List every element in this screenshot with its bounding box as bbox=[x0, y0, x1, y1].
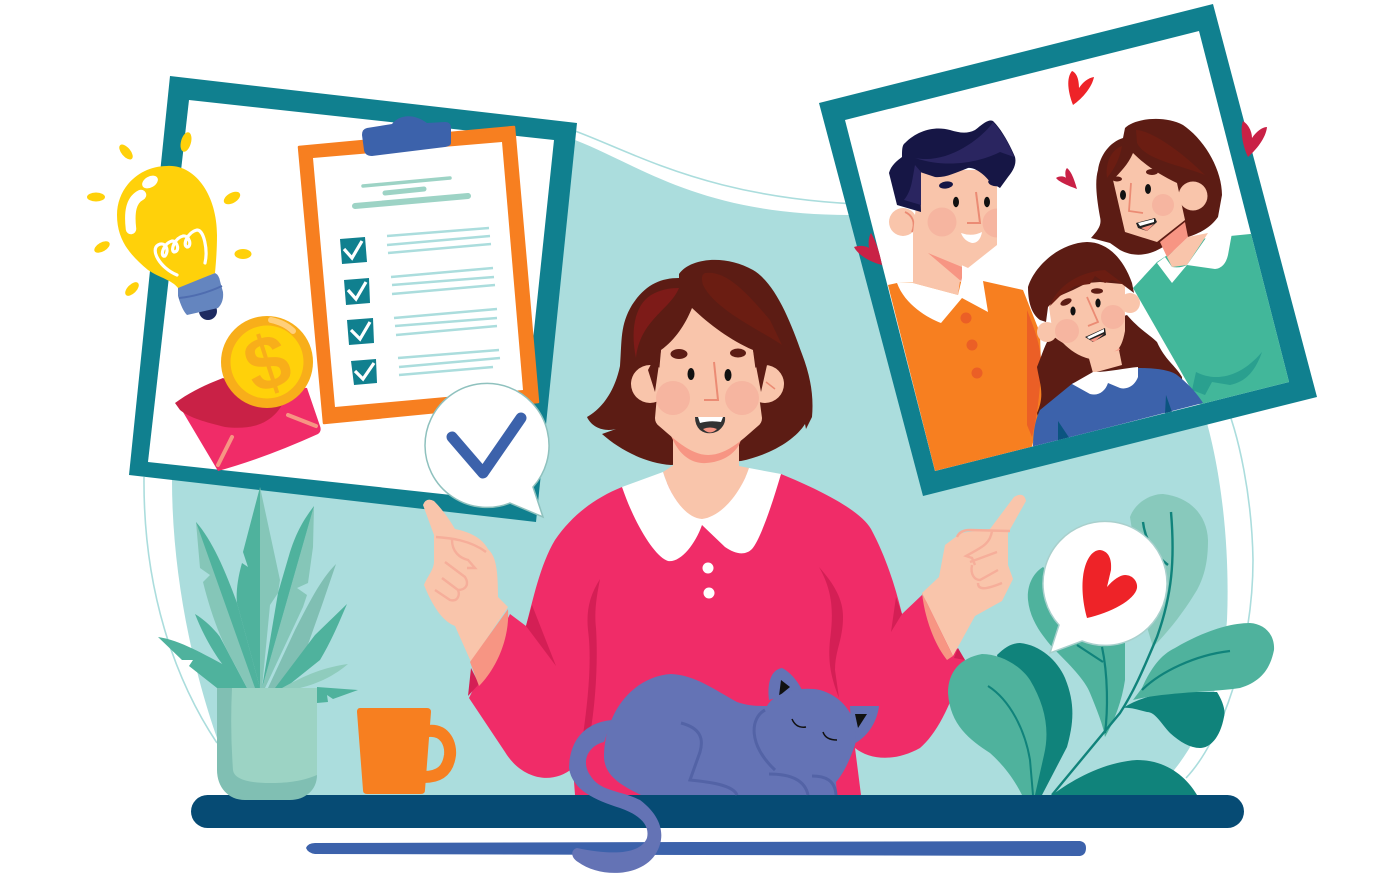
icon: envelope and coin: $ bbox=[234, 316, 301, 410]
dress shadows bbox=[468, 567, 965, 735]
family photo bbox=[888, 119, 1300, 471]
icon: envelope and coin bbox=[175, 316, 321, 471]
eyes bbox=[792, 719, 837, 740]
neck bbox=[673, 430, 739, 470]
woman bbox=[423, 260, 1026, 795]
body bbox=[604, 674, 856, 795]
panel: checklist frame bbox=[129, 76, 577, 522]
buttons bbox=[702, 562, 714, 598]
ears bbox=[768, 668, 802, 700]
body lines bbox=[681, 710, 836, 795]
plant: potted aloe bbox=[158, 487, 358, 703]
cat bbox=[569, 668, 879, 873]
right hand bbox=[922, 495, 1026, 660]
daughter bbox=[1028, 242, 1203, 447]
face details bbox=[656, 348, 759, 433]
plant pot bbox=[217, 688, 317, 800]
icon: light bulb bbox=[87, 131, 252, 320]
left hand bbox=[423, 500, 508, 686]
hair locks bbox=[648, 345, 767, 392]
ears bbox=[631, 365, 669, 403]
mother bbox=[1091, 119, 1300, 410]
background blob bbox=[144, 131, 1253, 795]
mug bbox=[357, 708, 450, 794]
icon: hearts bbox=[854, 71, 1267, 265]
chest bbox=[663, 466, 749, 521]
plant: leafy branch bbox=[948, 494, 1274, 795]
panel: family photo frame bbox=[819, 4, 1317, 496]
callout: check bubble bbox=[425, 383, 549, 517]
face bbox=[655, 308, 762, 455]
hair highlights bbox=[634, 288, 679, 358]
callout: heart bubble bbox=[1043, 521, 1167, 653]
floor line bbox=[306, 841, 1086, 856]
tail bbox=[569, 720, 661, 873]
father bbox=[888, 121, 1042, 471]
collar bbox=[622, 468, 781, 561]
clipboard bbox=[299, 116, 538, 423]
dress bbox=[469, 474, 965, 795]
hair bbox=[587, 260, 813, 465]
table top bbox=[191, 795, 1244, 828]
